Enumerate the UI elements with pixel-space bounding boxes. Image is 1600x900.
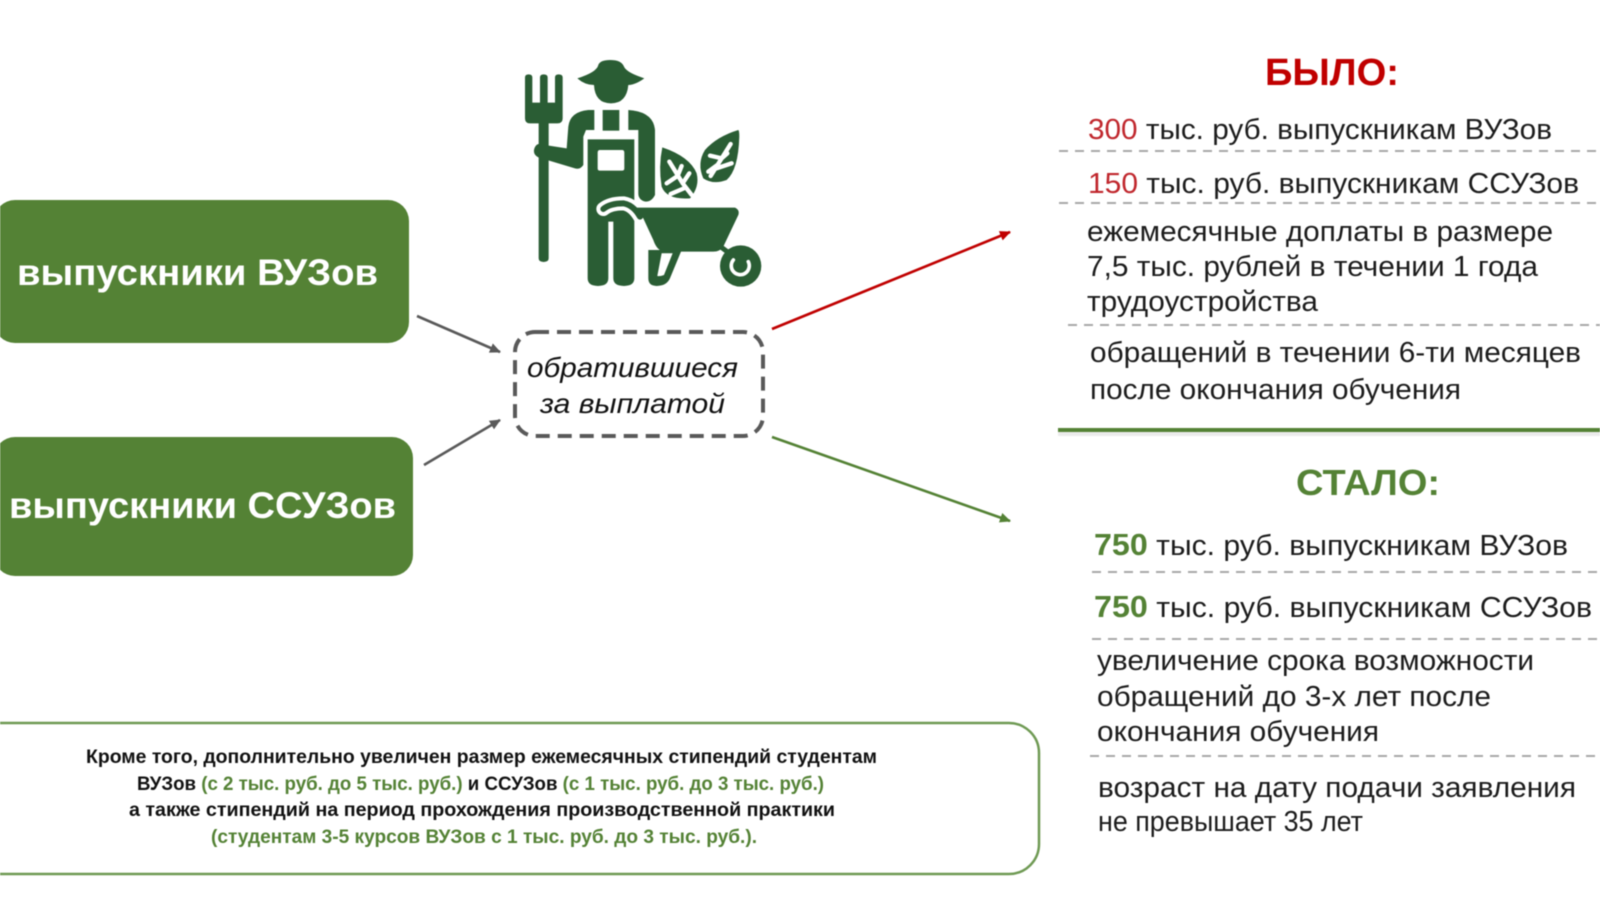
item: ежемесячные доплаты	[1087, 216, 1553, 318]
arrow: ССУЗ to applicants	[424, 420, 500, 465]
item: ежемесячные доплаты: ежемесячные доплаты в размере	[1087, 216, 1553, 248]
item: ежемесячные доплаты: трудоустройства	[1087, 286, 1319, 318]
icon: farmer with pitchfork and wheelbarrow	[525, 60, 761, 287]
item: возраст	[1098, 772, 1576, 838]
panel: было	[1059, 52, 1600, 406]
callout: стипендии: ВУЗов (с 2 тыс. руб. до 5 тыс. руб.) и ССУЗов (с 1 тыс. руб. до 3 тыс. руб.)	[137, 774, 824, 795]
panel: стало	[1090, 462, 1600, 838]
callout: стипендии: а также стипендий на период прохождения производственной практики	[129, 800, 835, 821]
box: выпускники ВУЗов: выпускники ВУЗов	[17, 252, 378, 293]
item: увеличение срока: увеличение срока возможности	[1097, 645, 1534, 677]
arrow: to before panel	[772, 232, 1010, 329]
item: обращений в течении: после окончания обучения	[1090, 374, 1461, 406]
item: 150 тыс.: 150 тыс. руб. выпускникам ССУЗов	[1088, 168, 1579, 200]
dashed box: обратившиеся за выплатой: за выплатой	[539, 388, 725, 419]
item: увеличение срока	[1097, 645, 1534, 748]
box: выпускники ВУЗов	[0, 200, 409, 343]
arrow: to after panel	[772, 437, 1010, 521]
callout: стипендии: (студентам 3-5 курсов ВУЗов с 1 тыс. руб. до 3 тыс. руб.).	[211, 827, 757, 848]
heading: БЫЛО: БЫЛО:	[1265, 52, 1399, 94]
item: возраст: не превышает 35 лет	[1098, 806, 1363, 838]
item: обращений в течении: обращений в течении 6-ти месяцев	[1090, 337, 1581, 369]
callout: стипендии	[0, 723, 1039, 874]
divider: green rule	[1058, 428, 1600, 436]
item: увеличение срока: обращений до 3-х лет после	[1097, 681, 1491, 713]
item: ежемесячные доплаты: 7,5 тыс. рублей в течении 1 года	[1087, 251, 1539, 283]
box: выпускники ССУЗов	[0, 437, 413, 576]
dashed box: обратившиеся за выплатой	[515, 332, 763, 436]
item: возраст: возраст на дату подачи заявления	[1098, 772, 1576, 804]
dashed box: обратившиеся за выплатой: обратившиеся	[527, 352, 738, 383]
item: обращений в течении	[1090, 337, 1581, 406]
heading: СТАЛО: СТАЛО:	[1296, 462, 1440, 503]
item: 750 тыс. ВУЗов: 750 тыс. руб. выпускникам ВУЗов	[1094, 527, 1568, 562]
item: 300 тыс.: 300 тыс. руб. выпускникам ВУЗов	[1088, 114, 1552, 146]
item: 750 тыс. ССУЗов: 750 тыс. руб. выпускникам ССУЗов	[1094, 589, 1592, 624]
box: выпускники ССУЗов: выпускники ССУЗов	[9, 485, 396, 526]
item: увеличение срока: окончания обучения	[1097, 716, 1379, 748]
arrow: ВУЗ to applicants	[417, 316, 500, 352]
callout: стипендии: Кроме того, дополнительно увеличен размер ежемесячных стипендий студентам	[86, 747, 877, 768]
